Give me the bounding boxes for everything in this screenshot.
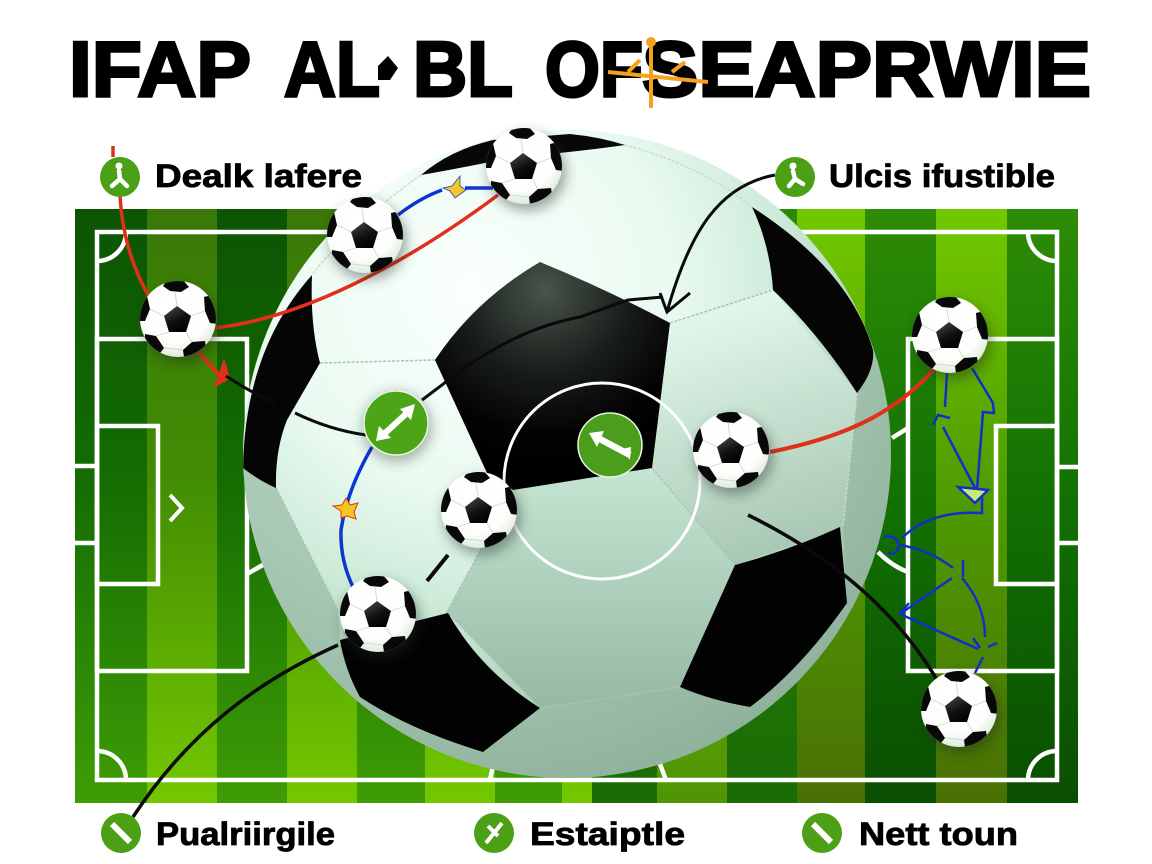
ball: centre (439, 470, 521, 555)
big football (243, 130, 891, 778)
ball: top (484, 126, 566, 211)
legend: Pualriirgile (101, 813, 335, 853)
red route: left (113, 146, 498, 384)
icon: double arrow badge (362, 391, 432, 462)
legend: Dealk lafere: Dealk lafere (155, 158, 362, 194)
blue route: left curve (341, 447, 372, 587)
ball: left (138, 279, 220, 364)
blue route: top (398, 188, 493, 215)
legend: Estaiptle (474, 813, 685, 853)
blue tactical sketch (884, 368, 997, 673)
legend: Pualriirgile: Pualriirgile (156, 816, 335, 852)
icon: orange title glyph (608, 39, 708, 108)
red route: right (770, 368, 935, 452)
legend: Nett toun: Nett toun (859, 816, 1018, 852)
title: BL (413, 25, 513, 113)
ball: lower right (919, 669, 1001, 754)
icon: star on top route (443, 176, 466, 198)
ball: centre right (691, 410, 773, 495)
icon: star on left route (333, 498, 358, 519)
legend: Dealk lafere (100, 157, 362, 197)
title: IFAP (69, 25, 251, 113)
black route: centre left (226, 297, 663, 581)
ball: top left (325, 195, 407, 280)
football pitch (75, 209, 1078, 803)
title (69, 25, 1091, 113)
ball: right (910, 295, 992, 380)
icon: arrow badge (578, 413, 642, 477)
black arrow: top right callout (660, 175, 775, 312)
legend: Ulcis ifustible: Ulcis ifustible (829, 158, 1055, 194)
title: OF (545, 25, 643, 113)
legend: Ulcis ifustible (775, 157, 1055, 197)
icon: pitch chevron (170, 495, 182, 521)
legend: Estaiptle: Estaiptle (530, 816, 685, 852)
legend: Nett toun (802, 813, 1018, 853)
centre circle (504, 383, 700, 579)
black route: bottom left (133, 645, 338, 817)
black route: bottom right (748, 515, 940, 685)
ball: lower left (338, 574, 420, 659)
title: SEAPRWIE (642, 25, 1091, 113)
ball markers (138, 126, 1001, 754)
title: AL (284, 25, 380, 113)
